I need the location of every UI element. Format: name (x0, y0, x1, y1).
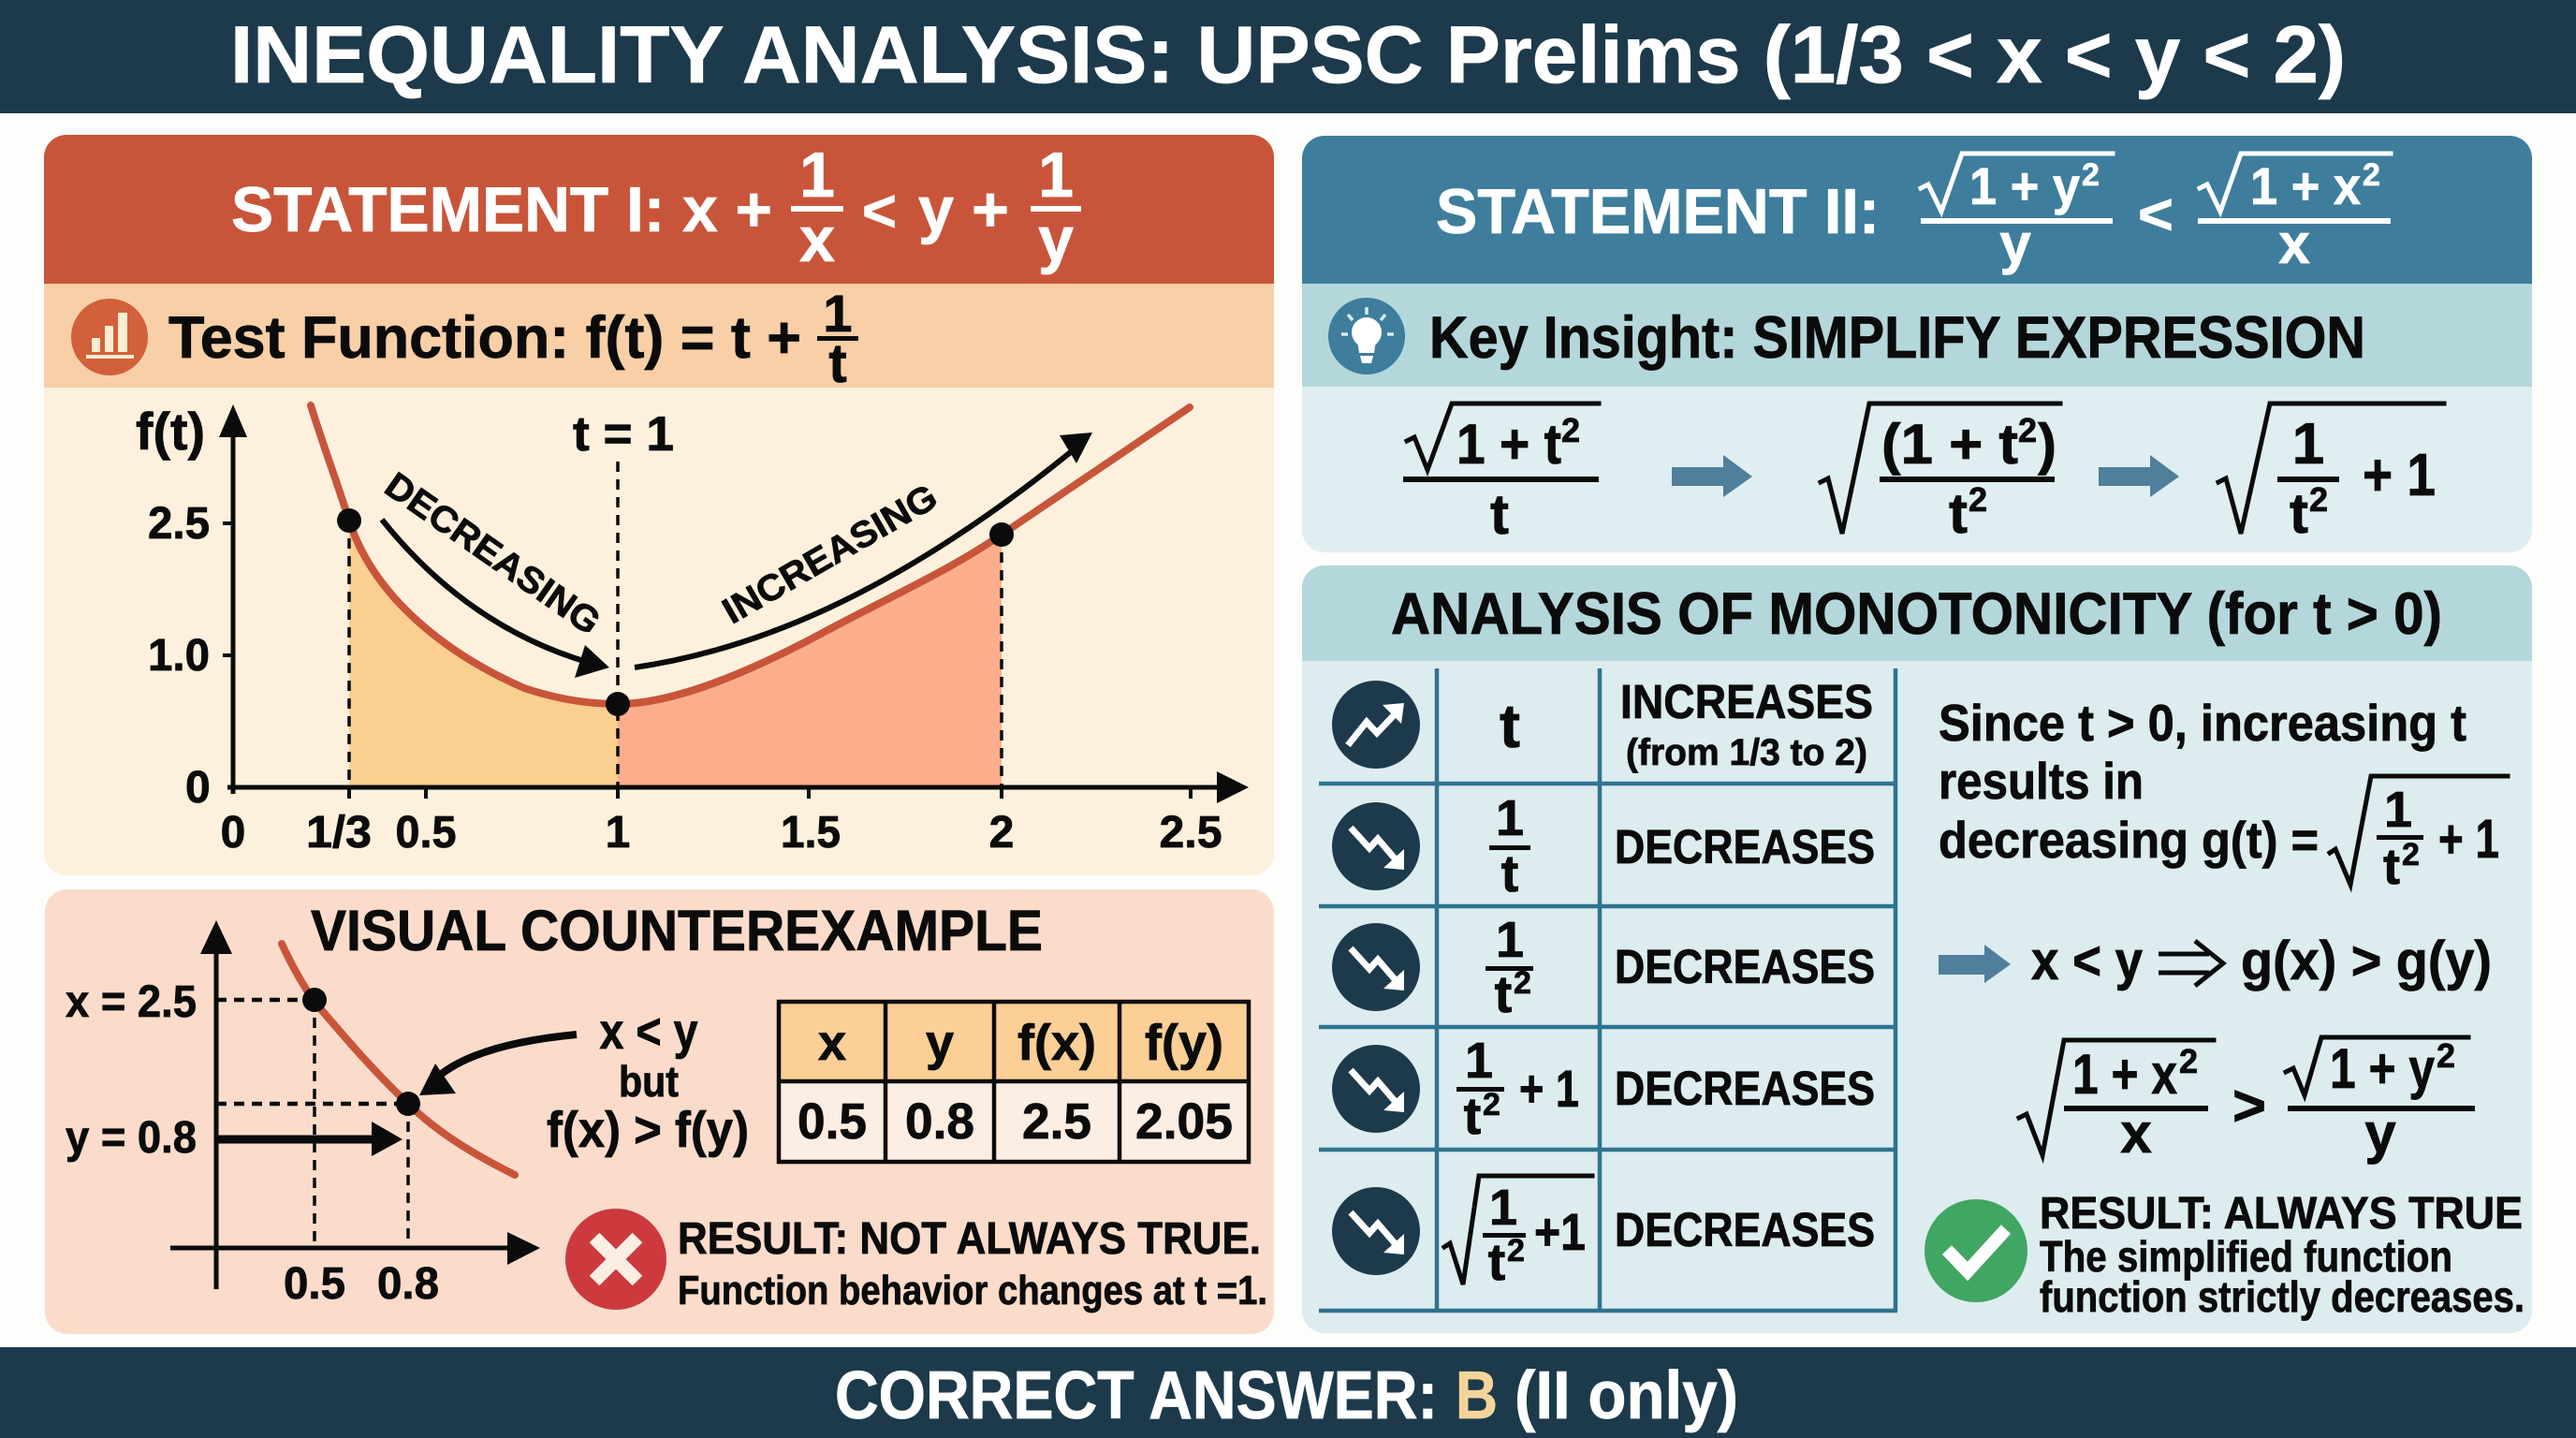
test function strip (44, 284, 1274, 394)
table: counterexample values: x (818, 1015, 846, 1071)
chart: f(t) curve: 0.5 (395, 808, 457, 858)
row: 1/t: DECREASES (1615, 820, 1875, 873)
formula: sqrt((1+t^2)/t^2): ) (2038, 413, 2056, 476)
callout: x<y but f(x)>f(y): x < y (599, 1004, 698, 1060)
row: 1/t^2+1: + 1 (1519, 1059, 1579, 1118)
result: always true (2040, 1189, 2525, 1321)
icon: bar chart (71, 299, 148, 375)
explanation text: 2 (2402, 837, 2420, 873)
callout: x<y but f(x)>f(y) (419, 1004, 749, 1158)
row: 1/t (1332, 790, 1875, 902)
counterexample heading: VISUAL COUNTEREXAMPLE (311, 899, 1043, 962)
table: counterexample values: y (926, 1015, 954, 1071)
table: counterexample values: 0.5 (798, 1093, 867, 1150)
test function strip: Test Function: f(t) = t + (168, 305, 801, 371)
row: sqrt(1/t^2+1): DECREASES (1615, 1203, 1875, 1256)
inequality conclusion: y (2364, 1102, 2396, 1165)
formula: sqrt((1+t^2)/t^2): (1 + t (1881, 413, 2018, 476)
shaded increasing region (618, 535, 1002, 787)
statement II heading: y (1999, 213, 2031, 275)
statement II heading (1302, 136, 2532, 284)
explanation text: 1 (2384, 782, 2412, 838)
chart: f(t) curve: 0 (221, 808, 245, 858)
formula: sqrt(1+t^2)/t: t (1490, 483, 1509, 546)
monotonicity heading (1302, 565, 2532, 661)
answer banner (0, 1347, 2576, 1438)
statement I heading: 1 (799, 139, 835, 211)
chart: f(t) curve: 1 (606, 808, 630, 858)
result: always true: The simplified function (2040, 1232, 2452, 1281)
formula: sqrt((1+t^2)/t^2): t (1949, 482, 1968, 545)
arrow (2099, 455, 2179, 497)
statement II heading: 1 + x (2250, 156, 2361, 215)
chart: counterexample (66, 920, 540, 1309)
chart: f(t) curve: 2 (989, 808, 1014, 858)
row: 1/t^2+1: t (1464, 1086, 1481, 1145)
chart: f(t) curve: t = 1 (573, 407, 674, 462)
test function strip: t (828, 333, 847, 394)
row: sqrt(1/t^2+1): +1 (1534, 1202, 1586, 1261)
formula: sqrt(1/t^2+1): 2 (2309, 480, 2328, 519)
table: monotonicity (1319, 668, 1897, 1311)
chart: f(t) curve: 2.5 (148, 499, 210, 549)
arrow: increasing: INCREASING (716, 477, 944, 632)
callout: x<y but f(x)>f(y): but (619, 1057, 679, 1106)
statement I heading: STATEMENT I: x + (231, 174, 772, 245)
panel: statement I (44, 135, 1274, 875)
result: not always true: Function behavior changes at t =1. (678, 1268, 1267, 1313)
row: sqrt(1/t^2+1): t (1488, 1232, 1505, 1291)
test function strip: 1 (823, 284, 853, 343)
chart: f(t) curve: f(t) (136, 402, 205, 461)
chart: f(t) curve (136, 402, 1249, 858)
formula: sqrt(1/t^2+1): t (2290, 482, 2308, 545)
formula: sqrt((1+t^2)/t^2) (1821, 404, 2060, 545)
row: 1/t^2+1 (1332, 1033, 1875, 1145)
chart: counterexample: y = 0.8 (66, 1113, 197, 1163)
curve (282, 944, 515, 1175)
formula: sqrt(1+t^2)/t: 1 + t (1456, 413, 1561, 476)
row: 1/t^2: t (1495, 964, 1512, 1023)
key insight strip: Key Insight: SIMPLIFY EXPRESSION (1429, 305, 2365, 371)
arrow (1939, 945, 2011, 983)
result: not always true (678, 1214, 1267, 1313)
row: 1/t^2+1: 1 (1465, 1033, 1493, 1089)
icon: red cross (565, 1209, 666, 1310)
arrow: increasing (635, 433, 1092, 668)
chart: f(t) curve: 2.5 (1159, 808, 1222, 858)
table: counterexample values (779, 1002, 1249, 1162)
row: sqrt(1/t^2+1): 2 (1507, 1233, 1525, 1269)
statement II heading: STATEMENT II: (1436, 176, 1880, 247)
explanation text: results in (1939, 752, 2144, 810)
shaded decreasing region (349, 521, 618, 787)
inequality conclusion: 2 (2437, 1036, 2455, 1075)
row: 1/t^2: DECREASES (1615, 940, 1875, 993)
row: sqrt(1/t^2+1): 1 (1489, 1180, 1517, 1236)
axes (227, 421, 1222, 794)
implication: x<y implies g(x)>g(y) (1939, 931, 2492, 991)
inequality conclusion: 2 (2179, 1042, 2198, 1080)
table: counterexample values: 2.5 (1022, 1093, 1091, 1150)
row: 1/t: 1 (1496, 790, 1524, 846)
explanation text: t (2383, 839, 2400, 895)
arrow: decreasing: DECREASING (377, 465, 607, 643)
chart: counterexample: 0.5 (284, 1259, 345, 1309)
chart: f(t) curve: 0 (185, 763, 211, 813)
result: not always true: RESULT: NOT ALWAYS TRUE. (678, 1214, 1261, 1264)
table: counterexample values: 2.05 (1135, 1093, 1233, 1150)
row: 1/t^2 (1332, 912, 1875, 1023)
row: t: (from 1/3 to 2) (1626, 732, 1867, 773)
curve (311, 405, 1190, 704)
row: sqrt(1/t^2+1) (1332, 1176, 1875, 1291)
title banner: INEQUALITY ANALYSIS: UPSC Prelims (1/3 < x < y < 2) (230, 10, 2346, 100)
inequality conclusion: 1 + x (2072, 1043, 2177, 1106)
inequality conclusion: > (2232, 1074, 2266, 1138)
icon: trend down (1332, 802, 1420, 890)
table: counterexample values: f(y) (1145, 1015, 1223, 1071)
statement I heading: 1 (1038, 139, 1074, 211)
chart: f(t) curve: 1/3 (306, 808, 372, 858)
statement II heading: 2 (2363, 157, 2380, 193)
statement II heading: 1 + y (1969, 156, 2080, 215)
formula: sqrt(1/t^2+1): 1 (2292, 412, 2324, 477)
formula: sqrt((1+t^2)/t^2): 2 (1969, 480, 1987, 519)
statement II heading: 2 (2082, 157, 2100, 193)
result: always true: RESULT: ALWAYS TRUE (2040, 1189, 2523, 1239)
statement I heading: x (799, 204, 835, 275)
icon: trend up (1332, 681, 1420, 769)
formula: sqrt(1/t^2+1) (2218, 404, 2444, 545)
inequality conclusion: 1 + y (2330, 1037, 2436, 1100)
formula: sqrt(1/t^2+1): + 1 (2363, 441, 2436, 508)
implication: x<y implies g(x)>g(y): g(x) > g(y) (2241, 931, 2492, 991)
table: counterexample values: 0.8 (905, 1093, 974, 1150)
row: 1/t: t (1501, 844, 1518, 902)
icon: trend down (1332, 1187, 1420, 1275)
panel: statement II (1302, 136, 2532, 552)
explanation text: decreasing g(t) = (1939, 811, 2319, 869)
chart: counterexample: x = 2.5 (66, 977, 197, 1027)
statement I heading: < (862, 177, 897, 244)
chart: f(t) curve: 1.0 (148, 631, 210, 681)
explanation text (1939, 694, 2508, 895)
statement I heading: y (1038, 204, 1074, 275)
row: t (1332, 675, 1873, 773)
implies symbol (2159, 941, 2223, 986)
icon: trend down (1332, 923, 1420, 1011)
row: 1/t^2: 1 (1496, 912, 1524, 968)
callout: x<y but f(x)>f(y): f(x) > f(y) (547, 1102, 749, 1158)
icon: green check (1925, 1199, 2027, 1302)
panel: analysis of monotonicity (1302, 565, 2532, 1333)
row: 1/t^2+1: 2 (1483, 1087, 1500, 1123)
explanation text: Since t > 0, increasing t (1939, 694, 2466, 752)
title banner (0, 0, 2576, 113)
formula: sqrt(1+t^2)/t: 2 (1561, 411, 1580, 449)
answer banner: (II only) (1515, 1358, 1738, 1433)
statement I heading: y + (918, 174, 1009, 245)
row: 1/t^2: 2 (1514, 965, 1531, 1001)
monotonicity heading: ANALYSIS OF MONOTONICITY (for t > 0) (1391, 581, 2442, 647)
statement II heading: x (2278, 213, 2310, 275)
inequality conclusion (2019, 1036, 2475, 1165)
formula: sqrt((1+t^2)/t^2): 2 (2018, 411, 2037, 449)
inequality conclusion: x (2120, 1102, 2152, 1165)
chart: f(t) curve: 1.5 (781, 808, 841, 858)
answer banner: CORRECT ANSWER: (835, 1358, 1438, 1433)
explanation text: + 1 (2438, 809, 2499, 870)
key insight strip (1302, 284, 2532, 387)
icon: trend down (1332, 1045, 1420, 1133)
table: counterexample values: f(x) (1017, 1015, 1096, 1071)
implication: x<y implies g(x)>g(y): x < y (2031, 931, 2143, 991)
statement II heading: < (2138, 183, 2174, 247)
row: 1/t^2+1: DECREASES (1615, 1062, 1875, 1115)
arrow (1672, 455, 1752, 497)
answer banner: B (1456, 1358, 1498, 1433)
icon: light bulb (1328, 298, 1405, 374)
row: t: t (1500, 691, 1520, 760)
formula: sqrt(1+t^2)/t (1403, 404, 1599, 546)
chart: counterexample: 0.8 (377, 1259, 439, 1309)
panel: visual counterexample (45, 889, 1274, 1334)
row: t: INCREASES (1620, 675, 1873, 728)
statement I heading (44, 135, 1274, 284)
